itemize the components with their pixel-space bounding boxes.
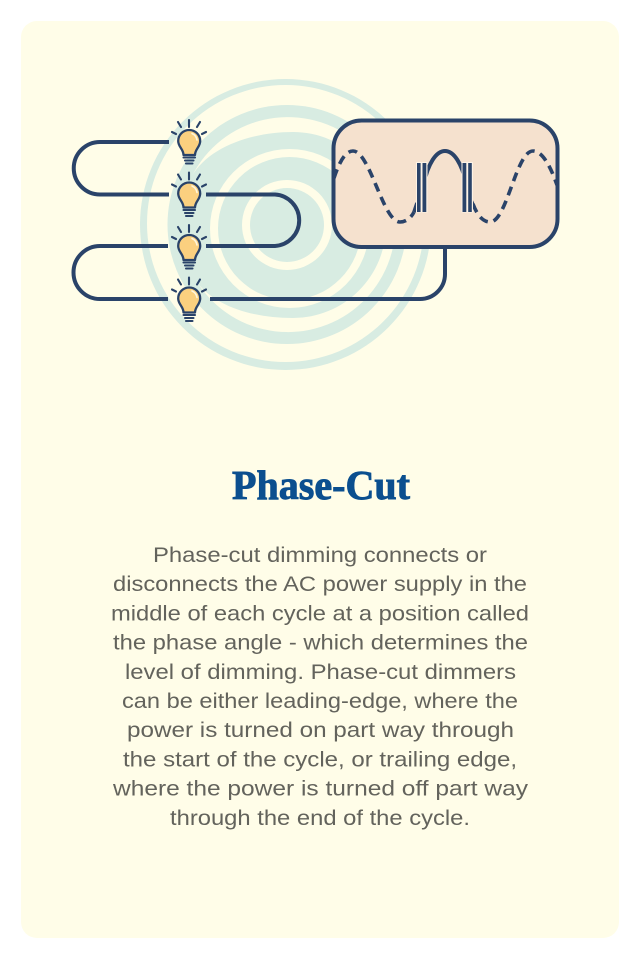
body text bbox=[111, 543, 529, 830]
icon: light bulb 4 bbox=[172, 278, 206, 321]
body text: where the power is turned off part way bbox=[112, 777, 528, 801]
icon: light bulb 1 bbox=[172, 120, 206, 164]
cut phase section bbox=[414, 151, 474, 212]
icon: light bulb 3 bbox=[172, 225, 206, 268]
wires bbox=[74, 142, 445, 299]
body text: can be either leading-edge, where the bbox=[122, 689, 518, 713]
body text: power is turned on part way through bbox=[127, 718, 514, 742]
body text: the start of the cycle, or trailing edge, bbox=[123, 747, 517, 771]
body text: through the end of the cycle. bbox=[170, 806, 470, 830]
dashed sine wave bbox=[334, 151, 557, 222]
body text: the phase angle - which determines the bbox=[113, 631, 528, 655]
body text: level of dimming. Phase-cut dimmers bbox=[125, 660, 516, 684]
body text: middle of each cycle at a position called bbox=[111, 601, 529, 625]
icon: light bulb 2 bbox=[172, 172, 206, 216]
body text: disconnects the AC power supply in the bbox=[113, 572, 527, 596]
concentric rings background bbox=[140, 79, 431, 370]
dimmer box with phase-cut waveform bbox=[334, 120, 558, 247]
title: Phase-Cut bbox=[232, 462, 410, 508]
body text: Phase-cut dimming connects or bbox=[153, 543, 487, 567]
